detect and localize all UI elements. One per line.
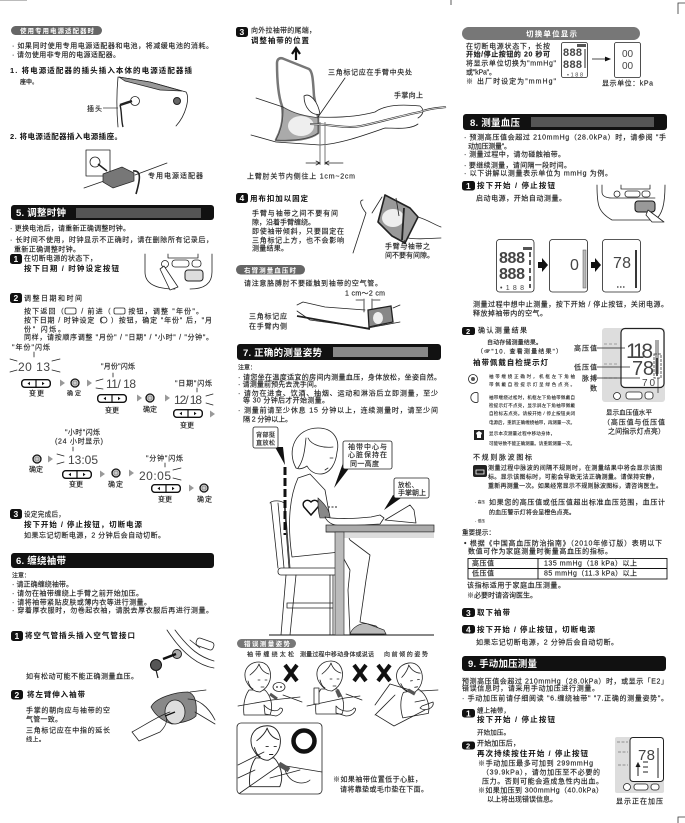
section bar 5: 5. 调整时钟: [16, 207, 66, 219]
cuff step 4: 用布扣加以固定: [250, 193, 308, 203]
illustration: loose cuff: [238, 662, 302, 716]
cuff check loose text: 自检标志点亮。请按开始 / 停止按钮关闭: [489, 410, 576, 417]
callout: cuff level with heart: [334, 441, 392, 488]
result labels: 显示血压值水平: [606, 408, 652, 416]
LCD panel: inflating: [615, 737, 664, 793]
result labels: 数: [590, 384, 597, 392]
cuff step 2: 2: [14, 690, 20, 700]
panel: power adapter use: [10, 26, 213, 194]
panel: incorrect posture: [237, 639, 438, 794]
table: blood pressure thresholds: 135 mmHg（18 kPa）以上: [544, 558, 637, 568]
unit instructions: 开始/停止按钮的 20 秒可: [466, 50, 550, 58]
cuff position labels: [247, 68, 423, 180]
cuff fit label: 手臂与袖带之: [385, 242, 430, 250]
flow: clock setting sequence: "分钟"闪烁: [146, 454, 183, 462]
LCD panel: result: [602, 328, 665, 402]
flow: clock setting sequence: 确定: [67, 390, 81, 398]
cuff fit label: [385, 242, 434, 260]
illustration: cuff on extended arm: [251, 48, 446, 165]
clock step 3: 按下开始 / 停止按钮，切断电源: [24, 519, 142, 529]
panel: switch unit display: [462, 27, 653, 88]
callout: back straight: [253, 427, 285, 465]
LCD: all segments: 888: [563, 47, 582, 59]
unit instructions: 将显示单位切换为"mmHg": [466, 58, 556, 68]
section bar 9: 9. 手动加压测量: [468, 658, 537, 670]
clock step 2: 按下返回（ ）/ 前进（ ）按钮，调整 "年份"。: [24, 306, 203, 316]
manual step 2: 压力。否则可能会造成急性内出血。: [482, 776, 603, 786]
LCD: all segments: •188: [567, 72, 583, 78]
unit instructions: ※ 出厂时设定为"mmHg": [466, 76, 556, 86]
adapter notes: · 如果同时使用专用电源适配器和电池，将减缓电池的消耗。: [12, 41, 213, 50]
measure step 1: [462, 180, 566, 202]
illustration: leaning forward: [375, 661, 438, 726]
manual notes: [462, 676, 668, 702]
cuff position labels: 手掌向上: [394, 90, 423, 100]
table: blood pressure thresholds: 85 mmHg（11.3 kPa）以上: [544, 568, 637, 578]
important notes: 重要提示：: [462, 528, 495, 536]
section bar 6: 6. 缠绕袖带: [16, 555, 66, 567]
posture notes: [238, 364, 441, 424]
measure step 3: [462, 607, 510, 618]
irregular pulse text: 测量过程中脉波的间隔不规则时，在测量结果中将会显示该图: [488, 464, 662, 472]
measure step 4: 按下开始 / 停止按钮，切断电源: [477, 624, 596, 634]
cuff check ok text: [489, 373, 576, 388]
table: blood pressure thresholds: 低压值: [472, 568, 494, 578]
result labels: （高压值与低压值: [603, 418, 665, 426]
measure step 2: 自动存储测量结果。: [487, 338, 542, 346]
manual step 1: 开始加压。: [477, 728, 510, 736]
flow: clock setting sequence: (24 小时显示): [55, 436, 103, 446]
icon: cuff check loose: [471, 392, 478, 402]
panel: section 5 set clock: [10, 205, 215, 540]
measure step 2: （☞"10. 查看测量结果"）: [477, 348, 562, 356]
clock step 2: 份" 闪烁。: [24, 324, 65, 334]
measure step 2: [462, 326, 562, 356]
cuff step 4: 4: [240, 193, 244, 203]
irregular pulse heading: 不规则脉波图标: [473, 452, 532, 462]
cuff notes: · 请将袖带紧贴皮肤或薄内衣等进行测量。: [12, 598, 151, 606]
clock notes: [10, 224, 213, 254]
cuff step 2: 三角标记应在中指的延长: [26, 726, 110, 734]
arrow: [591, 258, 601, 272]
section bar 6: [11, 553, 214, 568]
stop note: 释放掉袖带内的空气。: [473, 308, 547, 318]
flow: clock setting sequence: 变更: [180, 420, 194, 430]
manual step 1: 按下开始 / 停止按钮: [477, 714, 556, 724]
stop note: 测量过程中想中止测量，按下开始 / 停止按钮，关闭电源。: [473, 300, 668, 308]
manual step 2: 2: [466, 742, 470, 750]
measure step 4: [462, 624, 618, 646]
cuff check loose text: [489, 394, 576, 426]
incorrect posture captions: [247, 650, 428, 658]
icon: body movement: [474, 430, 484, 440]
right arm label: 三角标记应: [249, 312, 287, 320]
manual step 2: 开始加压后，: [477, 738, 520, 748]
LCD sequence: zero: [550, 240, 588, 292]
manual notes: 错误信息时，请采用手动加压进行测量。: [462, 684, 599, 692]
cuff step 2: 将左臂伸入袖带: [27, 689, 86, 699]
right arm note: [244, 278, 385, 298]
important notes: 数值可作为家庭测量时衡量高血压的指标。: [468, 546, 612, 556]
incorrect posture captions: 袖带缠绕太松: [247, 650, 294, 658]
right arm note: 1 cm～2 cm: [345, 290, 385, 298]
incorrect posture captions: 测量过程中移动身体或说话: [300, 650, 374, 658]
flow: clock setting sequence: 变更: [69, 480, 83, 488]
clock step 2: 同样，请按顺序调整 "月份" / "日期" / "小时" / "分钟"。: [24, 332, 213, 342]
flow: clock setting sequence: 确定: [108, 480, 123, 488]
flow: clock setting sequence: 确定: [29, 464, 43, 474]
measure step 1: 按下开始 / 停止按钮: [477, 180, 556, 190]
section bar 9: [462, 656, 666, 671]
unit instructions: [466, 42, 556, 86]
icon: irregular pulse: [473, 465, 487, 477]
warning lamp note: - 高压: [475, 499, 486, 504]
unit instructions: 或"kPa"。: [466, 68, 496, 76]
LCD sequence: start: 888: [499, 250, 525, 267]
icon: monitor side with plug: [117, 77, 188, 127]
cuff step 4: 即使袖带倾斜，只要固定在: [252, 226, 344, 236]
result labels: [574, 344, 665, 436]
cuff step 2: 手掌的朝向应与袖带的空: [26, 706, 110, 714]
flow: clock setting sequence: "月份"闪烁: [101, 362, 135, 370]
flow: clock setting sequence: 12/ 18: [174, 393, 202, 407]
measure step 4: 4: [466, 624, 471, 634]
measure step 1: 启动电源，开始自动测量。: [476, 194, 566, 202]
flow: clock setting sequence: 20:05: [139, 469, 171, 483]
cuff check heading: 袖带佩戴自检提示灯: [473, 357, 548, 367]
measure notes: · 要继续测量，请间隔一段时间。: [464, 160, 571, 170]
clock notes: · 长时间不使用，时钟显示不正确时，请在删除所有记录后，: [10, 235, 213, 244]
heading pill: right arm: [236, 265, 305, 274]
clock step 2: [10, 293, 213, 342]
table: blood pressure thresholds: 高压值: [472, 558, 494, 568]
callout: relax palm up: 手掌朝上: [398, 488, 426, 497]
measure notes: · 预测高压值会超过 210mmHg（28.0kPa）时，请参阅 "手: [464, 132, 666, 142]
panel: section 8 measure: [462, 114, 668, 646]
icon: wall socket and adapter: [84, 150, 167, 194]
flow: clock setting sequence: 确定: [143, 404, 157, 414]
cuff step 3: [236, 26, 316, 45]
posture notes: · 测量前请至少休息 15 分钟以上，连续测量时，请至少间: [238, 406, 438, 414]
kPa label: 显示单位：kPa: [602, 78, 653, 88]
LCD panel: result: 70: [642, 378, 655, 389]
manual step 2: [462, 738, 603, 804]
manual notes: 预测高压值会超过 210mmHg（28.0kPa）时，或显示「E2」: [462, 676, 668, 686]
clock step 3: 3: [14, 509, 18, 519]
posture notes: 等 30 分钟后才开始测量。: [243, 396, 329, 404]
flow: clock setting sequence: 13:05: [68, 453, 98, 467]
cuff position labels: 三角标记应在手臂中央处: [328, 68, 412, 76]
cuff step 2: 线上。: [26, 736, 45, 744]
heading pill: switch unit: [462, 27, 640, 40]
panel: correct example box: [237, 723, 322, 794]
icon: device buttons pressed: [145, 254, 212, 290]
icon: cuff check ok: [468, 374, 478, 384]
flow: clock setting sequence: 变更: [158, 494, 172, 504]
clock step 3: 设定完成后，: [24, 510, 65, 518]
section bar 8: 8. 测量血压: [470, 117, 520, 129]
flow: clock setting sequence: 变更: [105, 406, 119, 414]
flow: clock setting sequence: "日期"闪烁: [175, 378, 212, 388]
adapter step 1: [10, 65, 192, 86]
cuff notes: · 请正确缠绕袖带。: [12, 580, 73, 588]
cuff check loose text: 电源后，重新正确缠绕袖带，再测量一次。: [489, 419, 575, 426]
body movement text: 显示本次测量过程中移动身体，: [489, 430, 555, 437]
cuff position labels: 上臂肘关节内侧往上 1cm~2cm: [247, 172, 355, 180]
cuff step 4: 三角标记上方，也不会影响: [252, 236, 344, 244]
result labels: 高压值: [574, 344, 597, 352]
LCD panel: result: 78: [632, 358, 654, 380]
body movement text: [489, 430, 575, 447]
panel: section 7 correct posture: [237, 344, 441, 635]
cuff notes: [12, 572, 213, 614]
measure step 3: 3: [466, 608, 471, 618]
heading pill: adapter: [11, 26, 102, 35]
measure step 3: 取下袖带: [477, 607, 510, 617]
posture notes: · 请勿在进食、饮酒、抽烟、运动和淋浴后立即测量，至少: [238, 388, 438, 398]
irregular pulse text: [488, 464, 662, 490]
clock step 3: [10, 509, 165, 540]
callout: relax palm up: [384, 478, 429, 510]
cuff step 4: 测量结果。: [252, 244, 288, 252]
adapter step 1: 1. 将电源适配器的插头插入本体的电源适配器插: [10, 65, 192, 75]
clock step 2: 调整日期和时间: [24, 294, 82, 302]
irregular pulse text: 重新再测量一次。如果经常显示不规则脉波图标，请咨询医生。: [488, 482, 662, 490]
warning lamp note: - 低压: [475, 518, 486, 523]
plug label: 插头: [87, 104, 102, 113]
warning lamp note: 如果您的高压值或低压值超出标准血压范围，血压计: [489, 498, 665, 506]
clock step 1: [10, 254, 120, 273]
manual step 1: 1: [466, 708, 471, 718]
section bar 7: 7. 正确的测量姿势: [243, 347, 322, 359]
cuff step 3: 3: [240, 27, 244, 37]
adapter step 2: 2. 将电源适配器插入电源插座。: [10, 131, 122, 141]
adapter notes: [12, 41, 213, 59]
cuff step 3: 向外拉袖带的尾端，: [251, 26, 316, 34]
icon: air tube plug: [150, 630, 215, 678]
cuff step 1: 如有松动可能不能正确测量血压。: [26, 672, 138, 680]
posture notes: · 请测量前预先去洗手间。: [238, 380, 321, 388]
clock step 1: 按下日期 / 时钟设定按钮: [24, 263, 120, 273]
clock step 1: 在切断电源的状态下，: [24, 254, 97, 262]
callout: back straight: 直放松: [256, 439, 275, 447]
callout: relax palm up: 放松、: [398, 480, 418, 489]
cuff fit label: 间不要有间隙。: [385, 250, 434, 260]
flow: clock setting sequence: "小时"闪烁: [65, 428, 100, 436]
right arm label: 在手臂内侧: [249, 322, 287, 330]
warning lamp note: [475, 498, 665, 523]
measure step 4: 如果忘记切断电源，2 分钟后会自动切断。: [476, 638, 618, 646]
manual step 2: 以上将出现错误信息。: [487, 794, 557, 804]
arrow: [538, 258, 548, 272]
unit instructions: 在切断电源状态下，长按: [466, 42, 550, 50]
manual step 1: 缠上袖带，: [477, 706, 510, 714]
plug label: [87, 104, 118, 113]
cuff step 2: 气管一致。: [26, 714, 62, 724]
LCD sequence: start: [496, 240, 534, 292]
cuff step 2: [11, 689, 110, 744]
measure notes: · 以下讲解以测量表示单位为 mmHg 为例。: [464, 168, 612, 178]
LCD: kPa: [614, 42, 640, 78]
LCD panel: result: 118: [626, 340, 653, 363]
icon: arm into cuff: [132, 690, 215, 741]
LCD sequence: zero: 0: [570, 257, 579, 274]
illustration: moving or talking: [307, 661, 366, 716]
LCD sequence: start: •188: [500, 285, 524, 292]
cuff check ok text: 袖带缠绕正确时，机框左下角袖: [489, 373, 576, 380]
cuff check ok text: 带佩戴自检提示灯呈绿色点亮。: [489, 381, 575, 388]
warning lamp note: 的血压警示灯将会呈橙色点亮。: [489, 508, 575, 516]
heading pill: incorrect posture: 错误测量姿势: [244, 639, 290, 648]
flow: clock setting sequence: 11/ 18: [106, 377, 136, 391]
LCD: kPa: 00: [622, 61, 633, 72]
right arm label: [249, 312, 287, 330]
manual step 2: ※如果加压到 300mmHg（40.0kPa）: [478, 786, 603, 794]
illustration: seated person: [269, 428, 434, 635]
cuff step 3: 调整袖带的位置: [251, 35, 310, 45]
flow: clock setting sequence: 20 13: [18, 360, 50, 374]
LCD: all segments: [562, 42, 588, 78]
illustration: fastened cuff: [353, 195, 441, 253]
cuff step 1: [11, 630, 138, 680]
cuff step 1: 1: [14, 631, 20, 641]
manual step 2: （39.9kPa），请勿加压至不必要的: [482, 768, 600, 776]
adapter label: 专用电源适配器: [148, 171, 203, 180]
cuff cushion note: ※如果袖带位置低于心脏，: [333, 774, 422, 784]
adapter step 1: 座中。: [20, 78, 38, 86]
arrow to kPa: [592, 57, 610, 61]
measure step 2: 2: [466, 327, 470, 336]
cuff check loose text: 袖带缠绕过松时，机框左下角袖带佩戴自: [489, 394, 575, 401]
inflating label: 显示正在加压: [616, 796, 663, 806]
measure notes: 动加压测量"。: [468, 142, 511, 150]
LCD: all segments: 888: [563, 59, 582, 71]
illustration: right arm cuff: [297, 299, 400, 329]
clock notes: · 更换电池后，请重新正确调整时钟。: [10, 224, 130, 232]
panel: section 6 wrap cuff: [11, 553, 215, 744]
cuff step 1: 将空气管插头插入空气管接口: [25, 630, 135, 640]
table notes: [467, 580, 565, 600]
measure step 2: 确认测量结果: [478, 326, 527, 334]
heading pill: right arm: 右臂测量血压时: [244, 266, 296, 274]
cuff step 4: 手臂与袖带之间不要有间: [252, 208, 338, 218]
heading pill: incorrect posture: [237, 639, 296, 648]
cuff step 4: [236, 193, 344, 252]
panel: section 9 manual inflation: [462, 656, 668, 806]
section bar 7: [237, 344, 441, 360]
posture notes: 隔 2 分钟以上。: [243, 414, 292, 424]
callout: cuff level with heart: 心脏保持在: [348, 450, 387, 459]
callout: cuff level with heart: 同一高度: [350, 459, 379, 468]
incorrect posture captions: 向前倾的姿势: [384, 650, 428, 658]
heading pill: adapter: 使用专用电源适配器时: [20, 26, 94, 35]
clock step 2: 按下日期 / 时钟设定（ ）按钮，确定 "年份" 后，"月: [24, 316, 212, 324]
heading pill: switch unit: 切换单位显示: [526, 28, 578, 38]
flow: clock setting sequence: [10, 342, 215, 504]
cuff check loose text: 检提示灯不点亮，显示屏左下角袖带佩戴: [489, 402, 576, 409]
manual step 2: 再次持续按住开始 / 停止按钮: [477, 748, 588, 758]
section bar 8: [463, 114, 667, 130]
flow: clock setting sequence: 变更: [29, 388, 44, 398]
result labels: 脉搏: [582, 374, 597, 382]
callout: cuff level with heart: 袖带中心与: [348, 442, 387, 451]
posture notes: 注意：: [238, 364, 256, 372]
manual notes: · 手动加压前请仔细阅读 "6.缠绕袖带" "7.正确的测量姿势"。: [462, 694, 668, 702]
LCD sequence: rising value: 78: [613, 255, 631, 272]
measure notes: [464, 132, 666, 178]
panel: cuff position: [236, 26, 446, 330]
clock notes: 重新正确调整时钟。: [14, 244, 80, 254]
section bar 5: [11, 205, 214, 220]
measure step 1: 1: [466, 181, 471, 191]
cuff cushion note: [333, 774, 428, 794]
result labels: 低压值: [574, 362, 597, 372]
clock step 1: 1: [14, 254, 18, 264]
posture notes: · 请您坐在温度适宜的房间内测量血压，身体放松，坐姿自然。: [238, 372, 441, 382]
right arm note: 请注意胳膊肘不要碰触到袖带的空气管。: [244, 278, 382, 288]
important notes: [462, 528, 662, 556]
measure notes: · 测量过程中，请勿碰触袖带。: [464, 150, 565, 158]
cuff cushion note: 请将靠垫或毛巾垫在下面。: [340, 784, 428, 794]
flow: clock setting sequence: "年份"闪烁: [12, 342, 50, 352]
important notes: • 根据《中国高血压防治指南》（2010年修订版）表明以下: [464, 538, 662, 548]
LCD sequence: rising value: [602, 240, 640, 292]
cuff step 4: 隙，沿着手臂缠绕。: [252, 218, 315, 226]
cuff notes: 注意：: [12, 572, 30, 580]
LCD sequence: start: 888: [499, 266, 525, 283]
body movement text: 可能导致不能正确测量。请重新测量一次。: [489, 440, 575, 447]
table notes: ※必要时请咨询医生。: [467, 590, 537, 600]
irregular pulse text: 标。显示该图标时，可能会导致无法正确测量。请保持安静，: [488, 473, 658, 481]
result labels: 之间指示灯点亮）: [608, 426, 665, 436]
table notes: 该指标适用于家庭血压测量。: [467, 580, 565, 590]
clock step 2: 2: [14, 293, 18, 303]
manual step 1: [462, 706, 556, 736]
adapter notes: · 请勿使用非专用的电源适配器。: [12, 50, 120, 59]
flow: clock setting sequence: 确定: [197, 494, 212, 504]
icon: start button pressed: [597, 185, 665, 222]
clock step 3: 如果忘记切断电源，2 分钟后会自动切断。: [24, 530, 165, 540]
stop note: [473, 300, 668, 318]
manual step 2: ※手动加压最多可加到 299mmHg: [478, 758, 593, 768]
cuff notes: · 穿着厚衣服时，勿卷起衣袖，请脱去厚衣服后再进行测量。: [12, 606, 213, 614]
callout: back straight: 背部挺: [256, 431, 275, 439]
table: blood pressure thresholds: [468, 558, 667, 579]
cuff notes: · 请勿在袖带缠绕上手臂之前开始加压。: [12, 588, 143, 598]
LCD panel: inflating: 78: [638, 747, 655, 764]
LCD: kPa: 00: [622, 49, 633, 60]
